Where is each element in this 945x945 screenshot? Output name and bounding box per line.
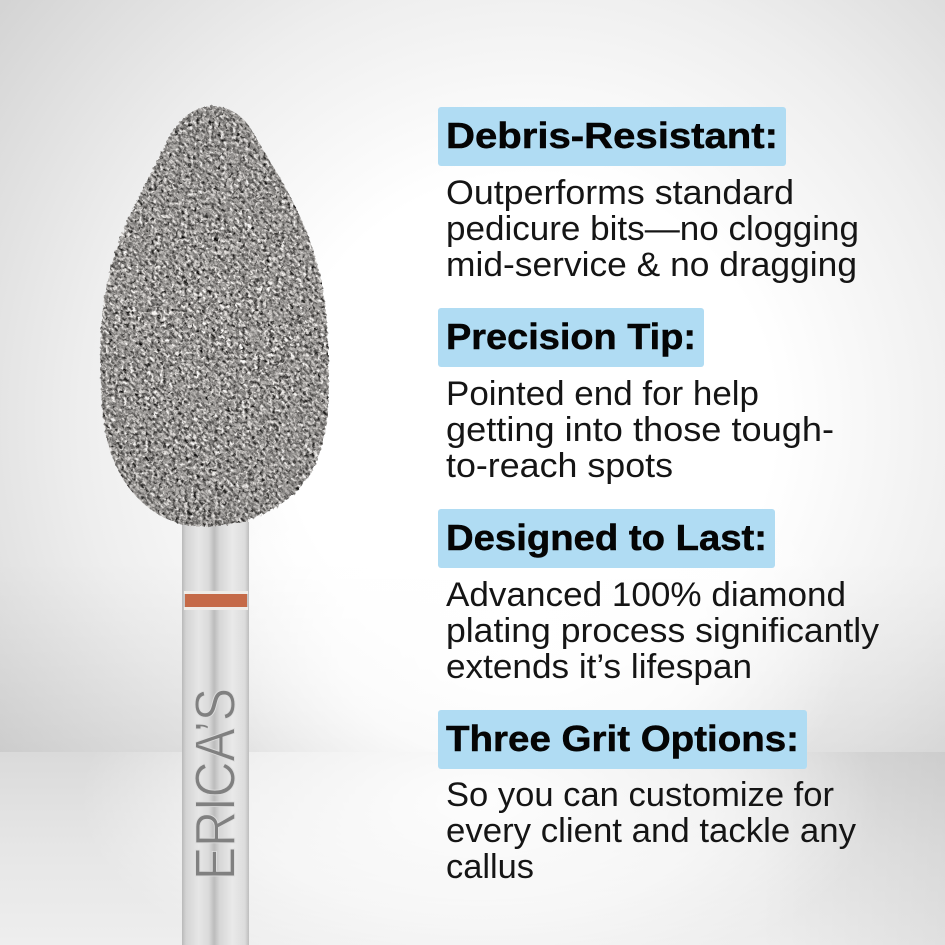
body text: [446, 576, 879, 686]
product: diamond drill bit: [95, 100, 335, 945]
body text: [446, 776, 856, 886]
feature: Three Grit Options: [438, 710, 856, 886]
body text: mid-service & no dragging: [446, 246, 857, 284]
body text: to-reach spots: [446, 447, 673, 485]
feature: Designed to Last: [438, 509, 879, 686]
body text: [446, 375, 834, 485]
heading highlight: [438, 710, 807, 769]
heading: Precision Tip:: [446, 316, 696, 357]
body text: getting into those tough-: [446, 411, 834, 449]
heading highlight: [438, 308, 704, 367]
diamond-coated head: [95, 100, 335, 532]
body text: callus: [446, 848, 534, 886]
orange grit ring: [184, 591, 248, 610]
heading: Debris-Resistant:: [446, 115, 778, 156]
feature: Debris-Resistant: [438, 107, 859, 284]
shaft engraving: ERICA'S: ERICA’S: [184, 688, 248, 880]
body text: So you can customize for: [446, 776, 834, 814]
bit shaft: [182, 522, 249, 945]
heading: Three Grit Options:: [446, 718, 799, 759]
feature: Precision Tip: [438, 308, 834, 485]
background: floor: [0, 752, 945, 945]
body text: plating process significantly: [446, 612, 879, 650]
body text: Pointed end for help: [446, 375, 759, 413]
body text: extends it’s lifespan: [446, 648, 752, 686]
body text: [446, 174, 859, 284]
body text: pedicure bits—no clogging: [446, 210, 859, 248]
body text: Advanced 100% diamond: [446, 576, 846, 614]
body text: every client and tackle any: [446, 812, 856, 850]
heading highlight: [438, 107, 786, 166]
body text: Outperforms standard: [446, 174, 794, 212]
heading highlight: [438, 509, 775, 568]
heading: Designed to Last:: [446, 517, 767, 558]
